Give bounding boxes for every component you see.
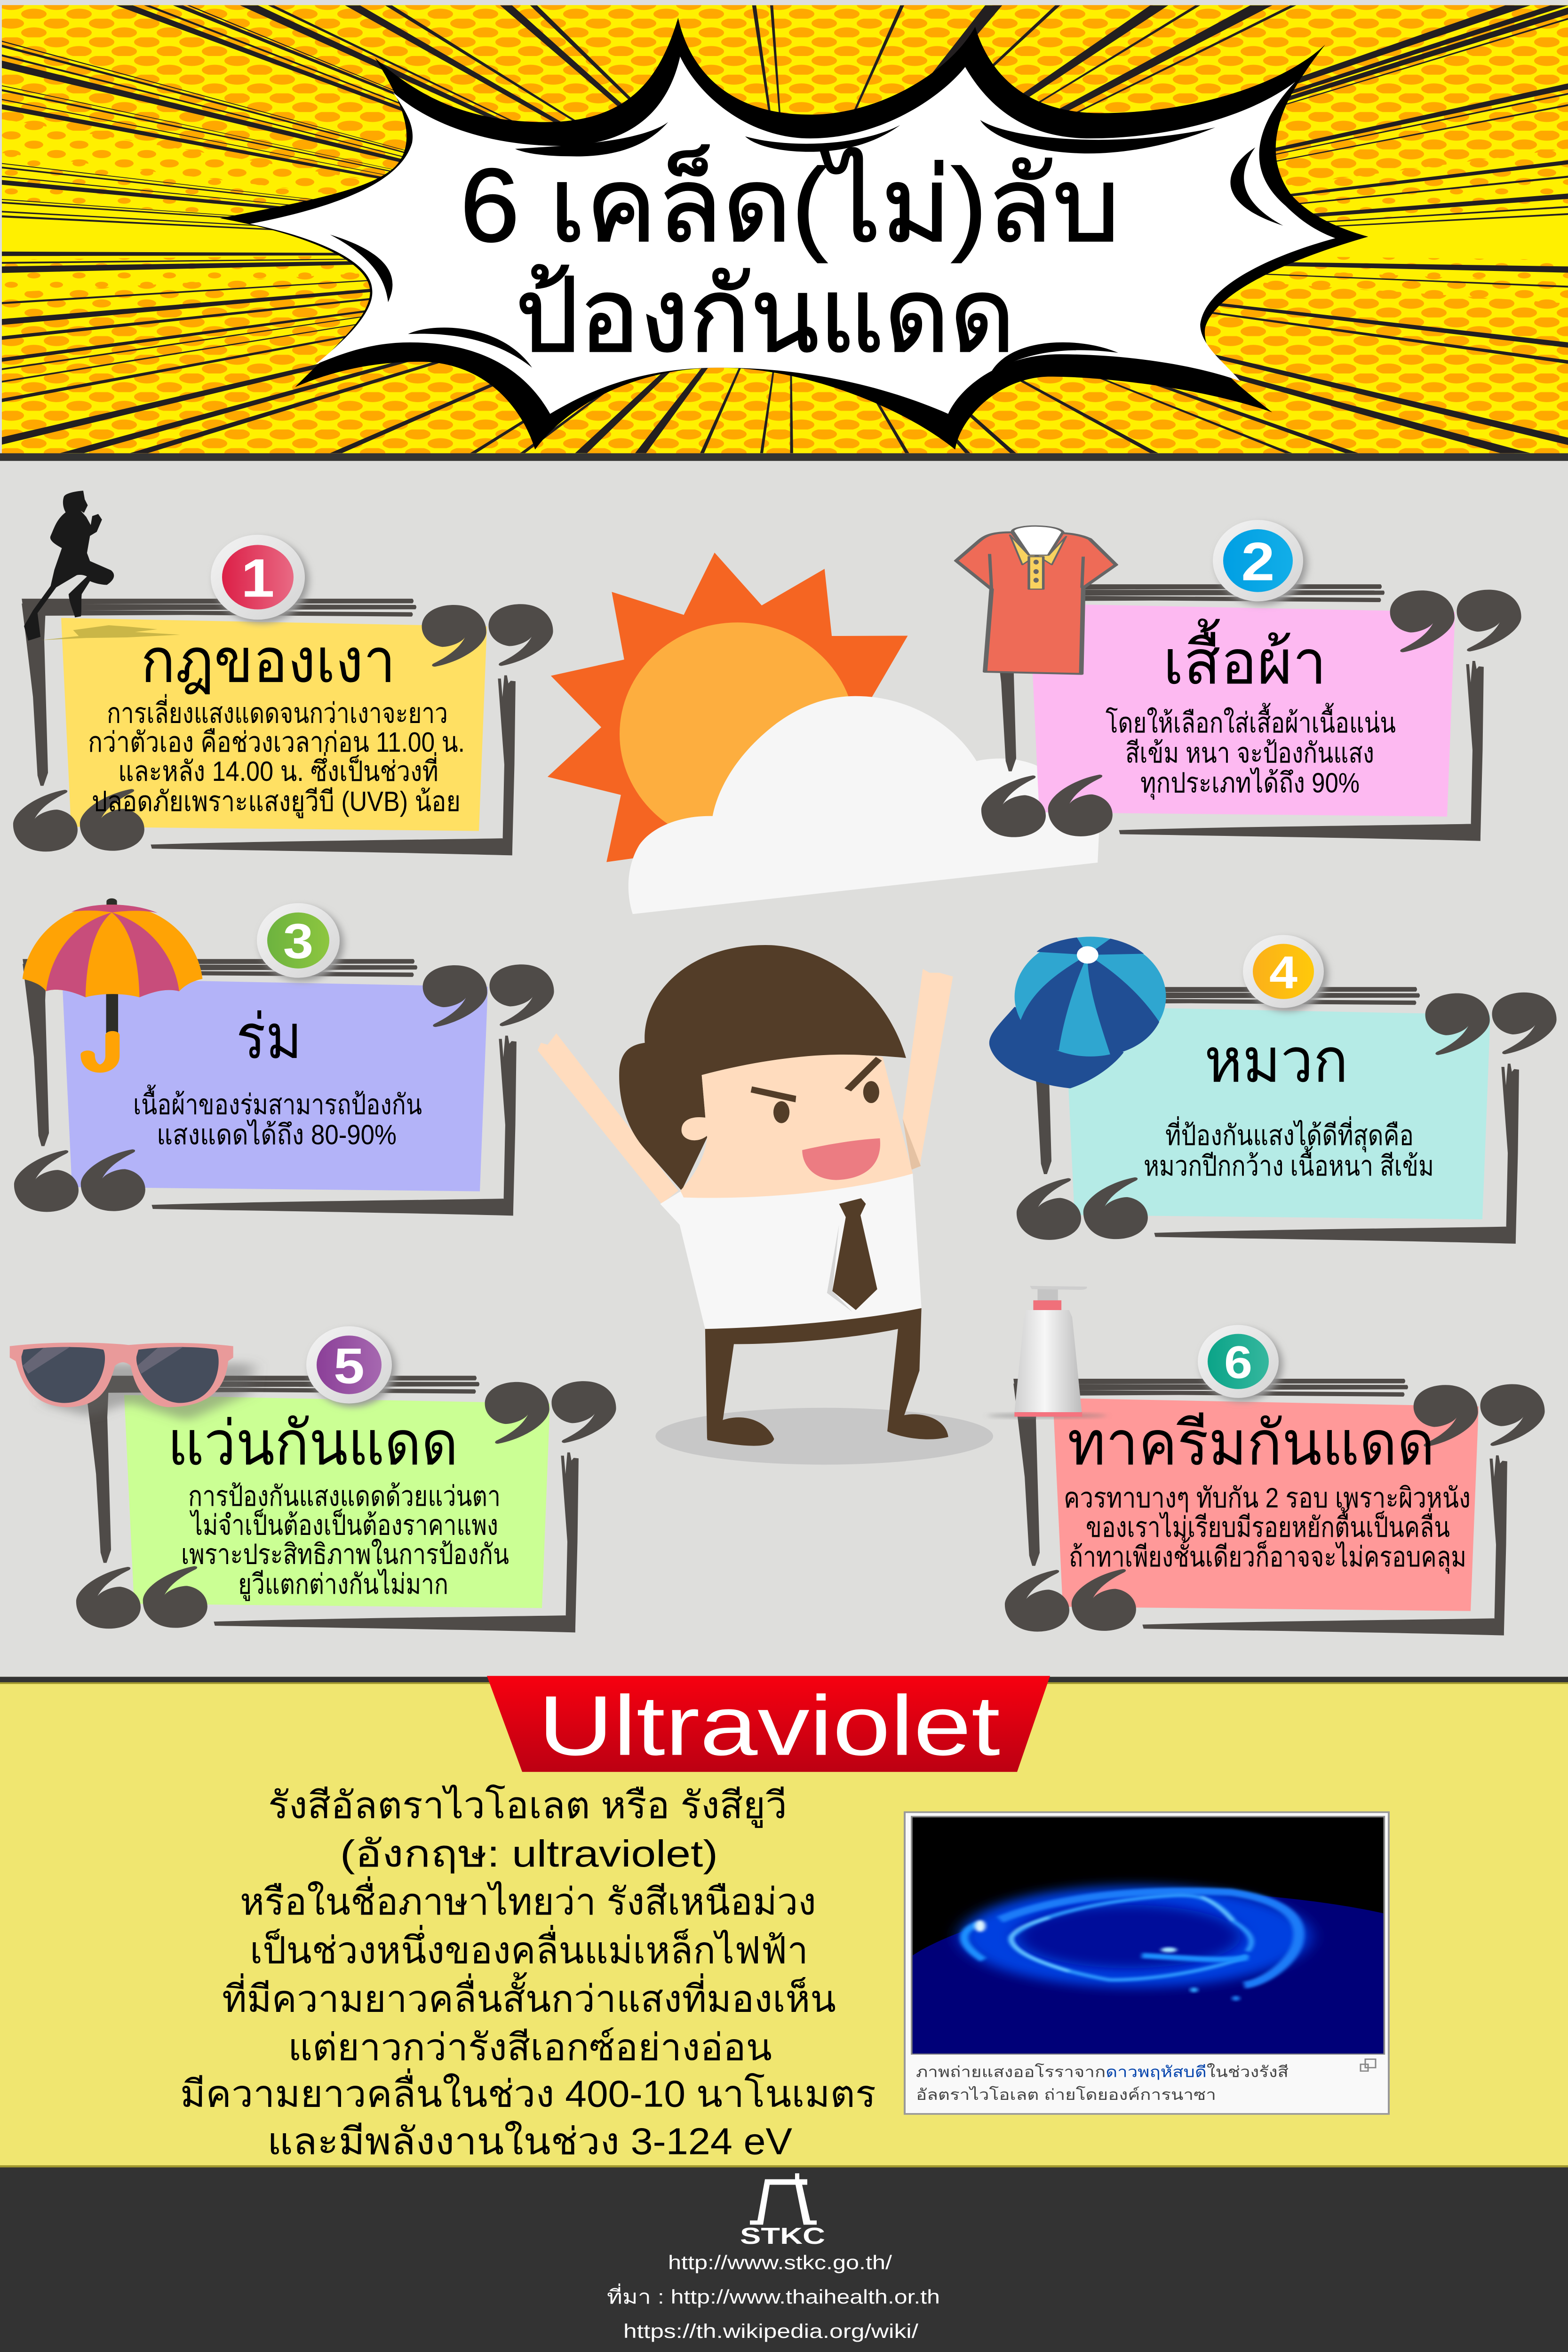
- icon: sunscreen bottle: [987, 1286, 1107, 1418]
- definition text: ที่มีความยาวคลื่นสั้นกว่าแสงที่มองเห็น: [222, 1972, 836, 2019]
- source links: http://www.stkc.go.th/: [668, 2252, 892, 2274]
- badge 1: [211, 535, 309, 623]
- icon: umbrella: [23, 898, 202, 1069]
- title: [460, 145, 1120, 373]
- source links: ที่มา : http://www.thaihealth.or.th: [607, 2284, 940, 2308]
- badge 6: 6: [1224, 1336, 1252, 1388]
- heading: หมวก: [1204, 1026, 1348, 1095]
- body text: แสงแดดได้ถึง 80-90%: [157, 1119, 397, 1151]
- panel 4: hat: [989, 935, 1557, 1244]
- photo card: [905, 1812, 1389, 2114]
- body text: กว่าตัวเอง คือช่วงเวลาก่อน 11.00 น.: [88, 727, 465, 758]
- icon: enlarge: [1361, 2059, 1376, 2071]
- definition text: เป็นช่วงหนึ่งของคลื่นแม่เหล็กไฟฟ้า: [250, 1925, 808, 1971]
- halftone background: [2, 5, 1568, 453]
- brush frame and quote marks: [1017, 987, 1557, 1244]
- body text: ที่ป้องกันแสงได้ดีที่สุดคือ: [1165, 1116, 1414, 1152]
- logo: STKC: STKC: [740, 2223, 825, 2249]
- definition text: และมีพลังงานในช่วง 3-124 eV: [267, 2121, 792, 2162]
- brush frame and quote marks: [76, 1376, 616, 1632]
- caption: อัลตราไวโอเลต ถ่ายโดยองค์การนาซา: [916, 2086, 1216, 2104]
- note box: [61, 618, 487, 831]
- panel 3: umbrella: [14, 898, 554, 1216]
- definition text: แต่ยาวกว่ารังสีเอกซ์อย่างอ่อน: [288, 2026, 772, 2068]
- panel: ultraviolet: [0, 1676, 1568, 2165]
- source links: [607, 2252, 940, 2343]
- body text: ไม่จำเป็นต้องเป็นต้องราคาแพง: [189, 1508, 498, 1541]
- note box: [1065, 1006, 1490, 1219]
- definition text: รังสีอัลตราไวโอเลต หรือ รังสียูวี: [268, 1784, 787, 1828]
- panel: footer: [0, 2165, 1568, 2352]
- illustration: sun and cloud: [548, 553, 1099, 914]
- title: ป้องกันแดด: [515, 258, 1015, 373]
- icon: runner shadow: [41, 625, 180, 640]
- body text: [1106, 703, 1396, 800]
- body text: หมวกปีกกว้าง เนื้อหนา สีเข้ม: [1144, 1146, 1434, 1182]
- heading: ร่ม: [236, 1003, 302, 1072]
- icon: shirt: [956, 526, 1116, 674]
- badge 1: 1: [241, 548, 275, 608]
- caption: ภาพถ่ายแสงออโรราจาก ดาวพฤหัสบดี ในช่วงรังสี: [916, 2063, 1289, 2081]
- note box: [62, 978, 488, 1191]
- badge 4: [1243, 935, 1328, 1011]
- heading: แว่นกันแดด: [167, 1409, 458, 1478]
- body text: และหลัง 14.00 น. ซึ่งเป็นช่วงที่: [118, 752, 438, 787]
- heading: ทาครีมกันแดด: [1067, 1409, 1435, 1478]
- body text: ของเราไม่เรียบมีรอยหยักตื้นเป็นคลื่น: [1086, 1507, 1450, 1543]
- body text: [1064, 1483, 1471, 1573]
- body text: [133, 1084, 422, 1151]
- panel 2: clothing: [956, 520, 1521, 841]
- badge 2: 2: [1241, 531, 1275, 592]
- logo: STKC: [740, 2173, 825, 2249]
- badge 3: 3: [283, 914, 313, 969]
- body text: [181, 1481, 509, 1601]
- brush frame and quote marks: [13, 599, 553, 855]
- panel: comic header: [0, 5, 1568, 453]
- definition text: [180, 1784, 876, 2162]
- halftone fade: medium dots: [0, 119, 1568, 323]
- footer background: [0, 2165, 1568, 2352]
- icon: cap: [989, 937, 1166, 1089]
- definition text: หรือในชื่อภาษาไทยว่า รังสีเหนือม่วง: [240, 1876, 816, 1923]
- body text: [1144, 1116, 1434, 1182]
- panel 6: sunscreen: [987, 1286, 1545, 1636]
- body text: เนื้อผ้าของร่มสามารถป้องกัน: [133, 1084, 422, 1120]
- brush frame and quote marks: [1005, 1379, 1545, 1636]
- heading: เสื้อผ้า: [1163, 618, 1327, 697]
- body text: การเลี่ยงแสงแดดจนกว่าเงาจะยาว: [107, 694, 448, 729]
- body text: เพราะประสิทธิภาพในการป้องกัน: [181, 1539, 509, 1570]
- body text: [88, 694, 465, 818]
- definition text: (อังกฤษ: ultraviolet): [340, 1833, 718, 1875]
- brush frame and quote marks: [981, 584, 1521, 841]
- olive rule top: [0, 1682, 1568, 1684]
- note box: [1053, 1398, 1479, 1611]
- panel 1: shadow rule: [13, 491, 553, 855]
- section background: [0, 1677, 1568, 2165]
- body text: ปลอดภัยเพราะแสงยูวีบี (UVB) น้อย: [92, 786, 461, 818]
- badge 5: [306, 1326, 396, 1407]
- note box: [1029, 604, 1455, 817]
- badge 4: 4: [1269, 946, 1297, 998]
- title: 6 เคล็ด(ไม่)ลับ: [460, 145, 1120, 263]
- definition text: มีความยาวคลื่นในช่วง 400-10 นาโนเมตร: [180, 2068, 876, 2115]
- icon: sunglasses: [10, 1343, 254, 1421]
- speed lines: [0, 5, 1568, 453]
- body text: สีเข้ม หนา จะป้องกันแสง: [1125, 738, 1374, 769]
- note box: [124, 1395, 550, 1608]
- caption: [916, 2063, 1289, 2104]
- body text: ยูวีแตกต่างกันไม่มาก: [238, 1568, 448, 1601]
- illustration: cheering man: [538, 945, 993, 1465]
- body text: โดยให้เลือกใส่เสื้อผ้าเนื้อแน่น: [1106, 703, 1396, 739]
- heading: กฎของเงา: [141, 627, 396, 695]
- body text: การป้องกันแสงแดดด้วยแว่นตา: [188, 1481, 501, 1512]
- panel 5: sunglasses: [10, 1326, 616, 1632]
- speech burst: [220, 18, 1368, 450]
- header divider: [0, 453, 1568, 461]
- badge 3: [257, 903, 343, 981]
- body text: ทุกประเภทได้ถึง 90%: [1140, 767, 1360, 800]
- brush frame and quote marks: [14, 959, 554, 1216]
- source links: https://th.wikipedia.org/wiki/: [623, 2320, 919, 2343]
- badge 2: [1213, 520, 1307, 605]
- olive rule bottom: [0, 2165, 1568, 2168]
- icon: runner: [24, 491, 114, 641]
- badge 5: 5: [334, 1338, 365, 1394]
- badge 6: [1198, 1325, 1282, 1401]
- top rule: [0, 1677, 1568, 1682]
- ribbon heading: Ultraviolet: [538, 1679, 1000, 1773]
- photo: aurora: [911, 1816, 1385, 2055]
